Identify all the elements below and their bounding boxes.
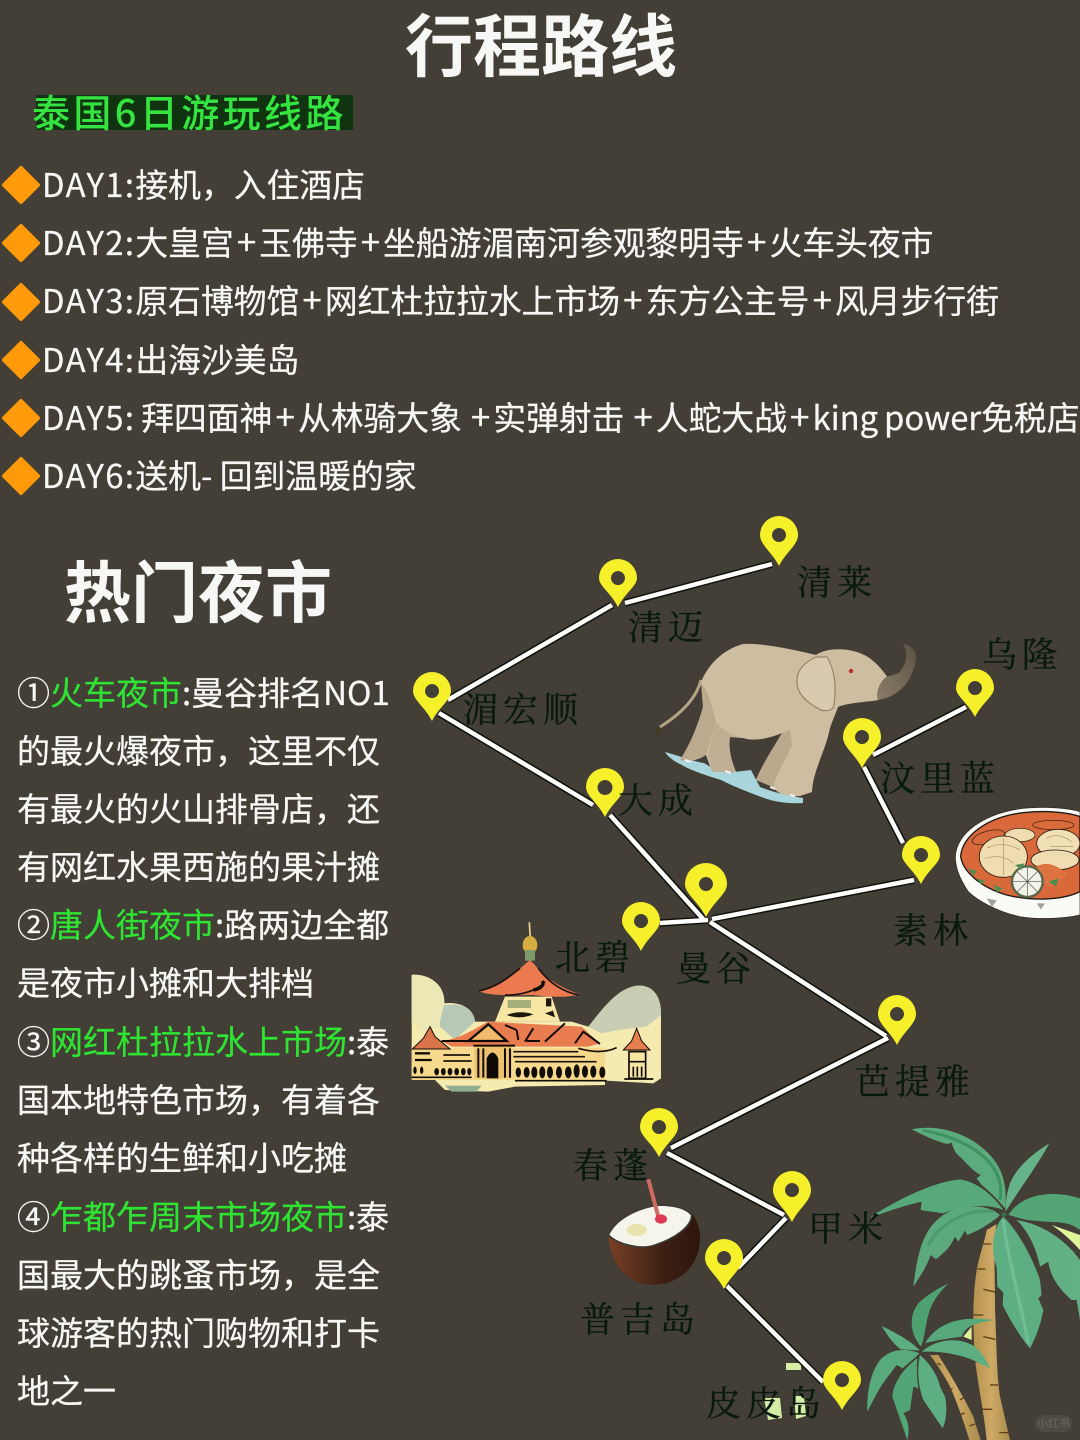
itinerary day 4: DAY4:出海沙美岛 xyxy=(42,335,299,382)
itinerary day 5: + xyxy=(471,390,490,441)
decorative pale patches xyxy=(764,1363,806,1420)
itinerary day 5: + xyxy=(790,390,809,441)
itinerary day 3: + xyxy=(302,273,322,324)
place name labels: 普吉岛 xyxy=(580,1293,700,1343)
itinerary day 5: DAY5: 拜四面神 从林骑大象 实弹射击 人蛇大战 king power免税店 xyxy=(42,393,1080,440)
place name labels: 曼谷 xyxy=(676,942,756,992)
place name labels: 北碧 xyxy=(555,931,635,981)
night market list: ①火车夜市:曼谷排名NO1 xyxy=(17,667,390,715)
place name labels: 清迈 xyxy=(628,601,708,651)
place name labels xyxy=(463,556,1062,1427)
place name labels: 素林 xyxy=(893,904,973,954)
night market list xyxy=(17,667,390,1413)
night market list: 的最火爆夜市，这里不仅 xyxy=(17,725,380,773)
itinerary day 2: + xyxy=(747,215,766,266)
itinerary diamonds xyxy=(2,166,40,496)
night market list: 是夜市小摊和大排档 xyxy=(17,957,314,1005)
place name labels: 乌隆 xyxy=(982,628,1062,678)
night market list: ③网红杜拉拉水上市场:泰 xyxy=(17,1016,389,1064)
itinerary day 3: DAY3:原石博物馆 网红杜拉拉水上市场 东方公主号 风月步行街 xyxy=(42,276,999,323)
subtitle highlight: 泰国6日游玩线路 xyxy=(32,83,347,138)
night market list: 有最火的火山排骨店，还 xyxy=(17,783,380,831)
night market list: 球游客的热门购物和打卡 xyxy=(17,1307,380,1355)
itinerary day 5: + xyxy=(633,390,653,441)
place name labels: 大成 xyxy=(618,774,698,824)
itinerary day 5: + xyxy=(275,390,295,441)
place name labels: 春蓬 xyxy=(573,1139,653,1189)
night market list: 国本地特色市场，有着各 xyxy=(17,1074,380,1122)
illustration: palm trees xyxy=(867,1128,1080,1440)
night market heading: 热门夜市 xyxy=(64,540,332,637)
illustration: coconut drink xyxy=(608,1179,700,1285)
night market list: 地之一 xyxy=(17,1365,116,1413)
night market list: 有网红水果西施的果汁摊 xyxy=(17,841,380,889)
place name labels: 芭提雅 xyxy=(855,1055,975,1105)
itinerary day 2: DAY2:大皇宫 玉佛寺 坐船游湄南河参观黎明寺 火车头夜市 xyxy=(42,218,933,265)
night market list: ②唐人街夜市:路两边全都 xyxy=(17,899,389,947)
itinerary day 3: + xyxy=(813,273,832,324)
itinerary day 2: + xyxy=(237,215,256,266)
night market list: 国最大的跳蚤市场，是全 xyxy=(17,1249,380,1297)
route lines xyxy=(439,564,966,1382)
itinerary day 6: DAY6:送机- 回到温暖的家 xyxy=(42,451,416,498)
watermark: 小红书 xyxy=(1037,1415,1070,1431)
place name labels: 湄宏顺 xyxy=(463,683,583,733)
place name labels: 皮皮岛 xyxy=(706,1377,826,1427)
illustration: soup bowl xyxy=(955,807,1080,918)
place name labels: 甲米 xyxy=(808,1202,888,1252)
place name labels: 汶里蓝 xyxy=(880,752,1000,802)
itinerary day 3: + xyxy=(623,273,643,324)
map pins xyxy=(413,516,994,1410)
night market list: 种各样的生鲜和小吃摊 xyxy=(17,1132,347,1180)
itinerary day 2: + xyxy=(361,215,380,266)
illustration: elephant xyxy=(655,644,916,803)
itinerary day 1: DAY1:接机，入住酒店 xyxy=(42,160,365,207)
night market list: ④乍都乍周末市场夜市:泰 xyxy=(17,1191,389,1239)
illustration: temple xyxy=(412,922,661,1092)
place name labels: 清莱 xyxy=(797,556,877,606)
